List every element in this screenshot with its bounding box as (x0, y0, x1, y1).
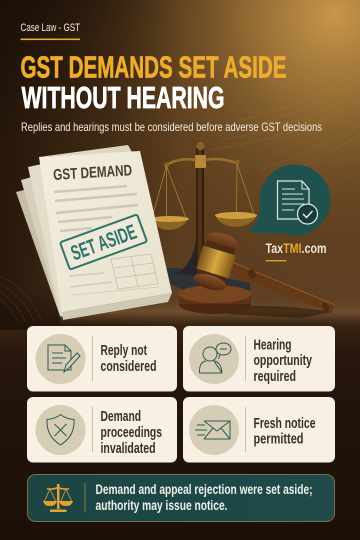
card: reply not considered: considered (100, 358, 156, 375)
card: hearing opportunity required (183, 326, 335, 392)
document heading: GST DEMAND (53, 162, 133, 184)
conclusion banner: authority may issue notice. (96, 498, 228, 513)
illustration: gavel (179, 229, 335, 318)
header label (20, 22, 80, 40)
icon: gold scales (43, 484, 73, 512)
stamp: set aside (60, 214, 147, 270)
card: hearing opportunity required: required (254, 368, 296, 385)
icon: teal document bubble (248, 164, 330, 236)
brand: TaxTMI.com (266, 241, 326, 261)
card: hearing opportunity required: Hearing (254, 336, 292, 354)
card: reply not considered (27, 326, 177, 392)
conclusion banner (28, 474, 334, 522)
card: fresh notice permitted: Fresh notice (254, 415, 316, 432)
icon: shield with cross (36, 405, 86, 455)
icon: document with pencil (36, 334, 86, 384)
card: demand proceedings invalidated: Demand (100, 408, 141, 425)
illustration: scales of justice (151, 142, 257, 293)
illustration: document stack (16, 145, 172, 320)
stamp: set aside: SET ASIDE (68, 221, 140, 265)
card: fresh notice permitted (183, 397, 335, 462)
form grid (111, 254, 158, 289)
card: reply not considered: Reply not (100, 342, 147, 359)
icon: person with speech bubble (189, 334, 239, 384)
card: demand proceedings invalidated: proceedings (100, 424, 162, 441)
card: demand proceedings invalidated (27, 397, 177, 462)
title (20, 50, 286, 115)
card: fresh notice permitted: permitted (254, 430, 304, 448)
brand: TaxTMI.com: TaxTMI.com (266, 241, 326, 256)
header label: Case Law - GST (20, 22, 80, 34)
card: hearing opportunity required: opportunity (254, 352, 312, 369)
title: WITHOUT HEARING (22, 80, 224, 115)
card: demand proceedings invalidated: invalidated (100, 440, 156, 457)
icon: envelope with speed lines (189, 405, 239, 455)
